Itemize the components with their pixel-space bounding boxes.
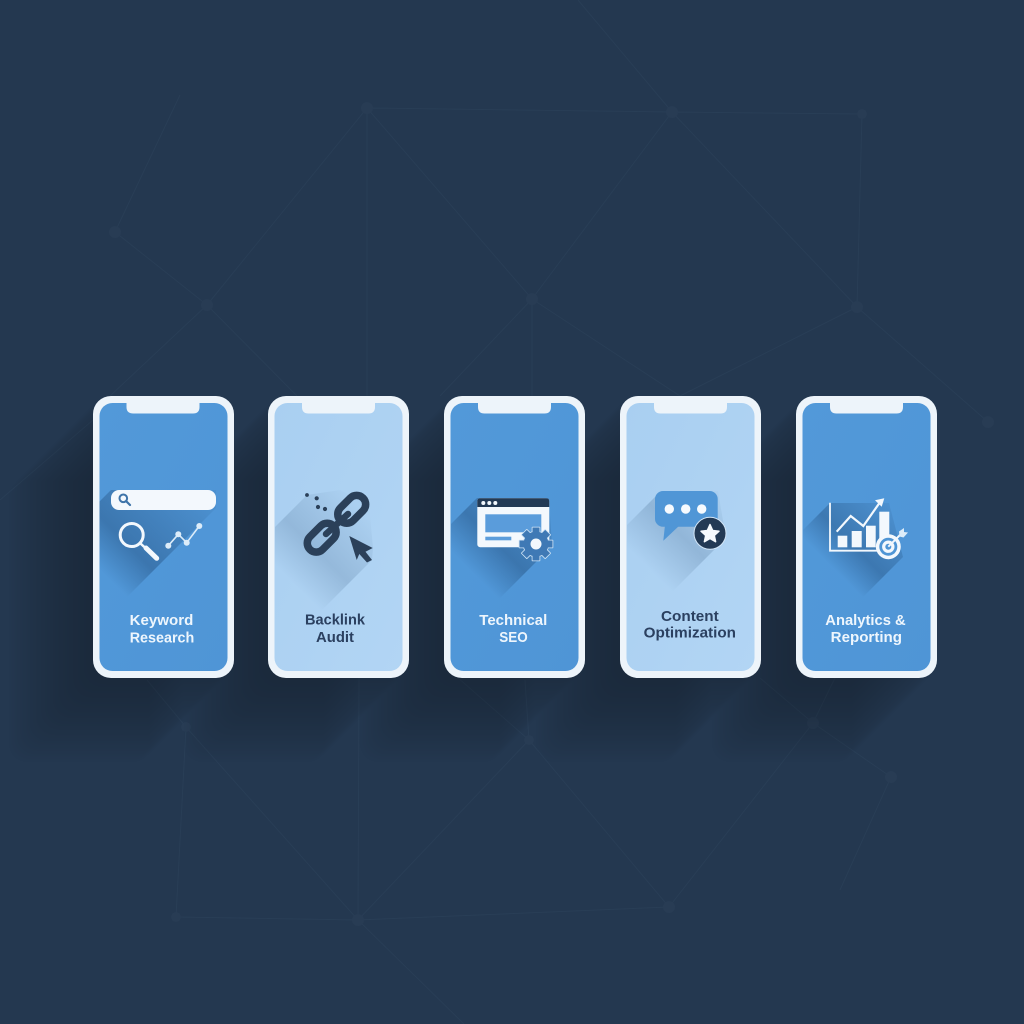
label: Technical SEO: SEO [499, 629, 528, 646]
icon shadow [275, 493, 373, 602]
icon: browser window [477, 498, 549, 547]
icon shadow [803, 503, 903, 598]
panel: Analytics and Reporting phone [796, 396, 937, 678]
icon: gear [520, 528, 552, 560]
panel: Technical SEO phone [444, 396, 585, 678]
icon: trend line [165, 523, 202, 549]
icon shadow [99, 490, 216, 597]
label: Analytics and Reporting [825, 612, 906, 646]
label: Analytics and Reporting: Analytics & [825, 612, 906, 629]
label: Content Optimization: Optimization [644, 625, 736, 642]
icon: magnifying glass [120, 524, 157, 558]
icon: target with dart [876, 528, 908, 559]
label: Analytics and Reporting: Reporting [831, 629, 902, 646]
label: Keyword Research [130, 612, 194, 646]
panel: Keyword Research phone [93, 396, 234, 678]
long diagonal phone shadows [9, 396, 937, 762]
icon shadow [451, 498, 552, 599]
icon: bar chart with trend arrow [830, 498, 889, 551]
panel: Backlink Audit phone [268, 396, 409, 678]
label: Backlink Audit [305, 611, 366, 646]
label: Backlink Audit: Audit [316, 629, 354, 646]
label: Technical SEO [479, 612, 547, 646]
panel: Content Optimization phone [620, 396, 761, 678]
icon shadow [627, 497, 724, 582]
icon: speech bubble [655, 491, 718, 541]
label: Keyword Research: Keyword [130, 612, 193, 629]
icon: cursor arrow [349, 536, 373, 562]
icon: search bar [111, 490, 216, 510]
icon: star badge [694, 517, 726, 549]
label: Content Optimization: Content [661, 608, 719, 625]
label: Backlink Audit: Backlink [305, 611, 366, 628]
label: Technical SEO: Technical [479, 612, 547, 629]
label: Keyword Research: Research [130, 629, 194, 646]
icon: broken chain link [304, 492, 369, 556]
label: Content Optimization [644, 608, 736, 642]
